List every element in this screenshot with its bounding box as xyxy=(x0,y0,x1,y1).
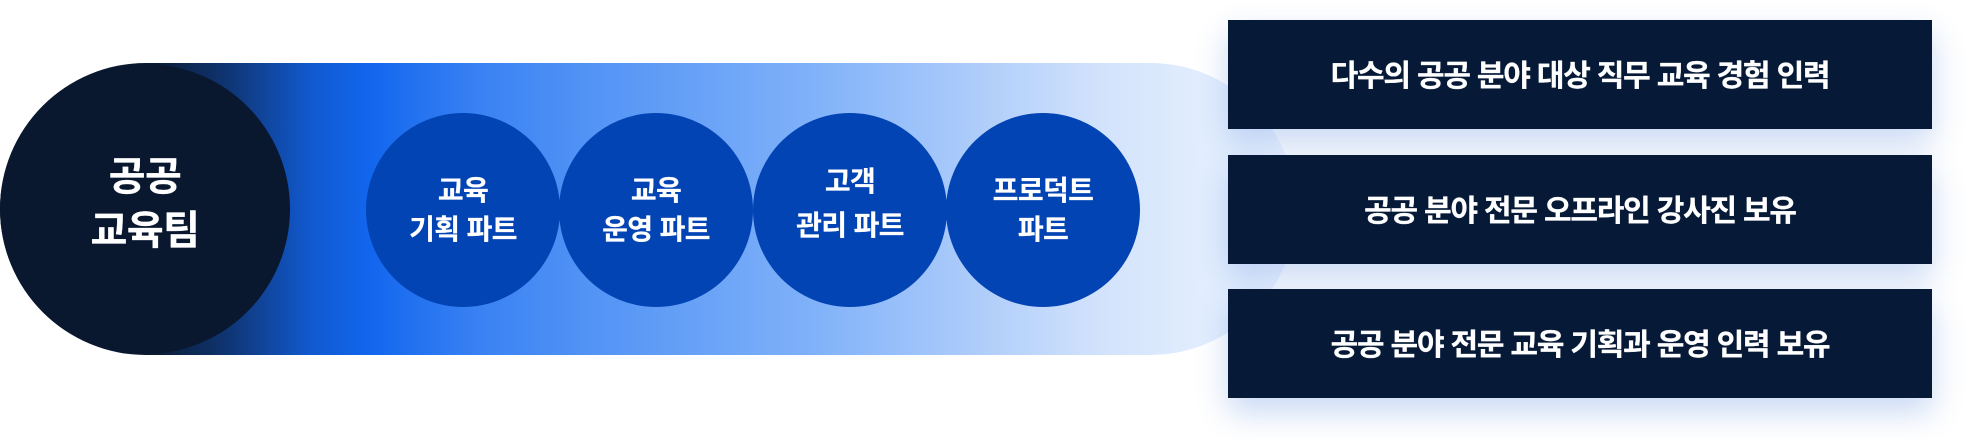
capability box 1: 다수의 공공 분야 대상 직무 교육 경험 인력 xyxy=(1331,60,1829,93)
part circle: customer management: 고객 xyxy=(825,166,875,197)
capability box 3: 공공 분야 전문 교육 기획과 운영 인력 보유 xyxy=(1331,329,1829,362)
capability box 1 xyxy=(1228,20,1932,129)
capability box 2 xyxy=(1228,155,1932,264)
part circle: education planning xyxy=(366,113,560,307)
main circle: public education team xyxy=(0,64,290,354)
part circle: product xyxy=(946,113,1140,307)
part circle: education operations: 교육 xyxy=(631,175,681,206)
part circle: education planning: 교육 xyxy=(438,175,488,206)
part circle: product: 프로덕트 xyxy=(993,175,1093,206)
gradient pill background xyxy=(0,63,1296,355)
part circle: customer management xyxy=(753,113,947,307)
part circle: education operations: 운영 파트 xyxy=(602,214,710,245)
part circle: customer management: 관리 파트 xyxy=(796,210,904,241)
main circle: public education team: 교육팀 xyxy=(91,208,199,252)
capability box 3 xyxy=(1228,289,1932,398)
part circle: education operations xyxy=(559,113,753,307)
part circle: education planning: 기획 파트 xyxy=(409,214,517,245)
capability box 2: 공공 분야 전문 오프라인 강사진 보유 xyxy=(1364,195,1796,228)
main circle: public education team: 공공 xyxy=(109,154,181,198)
part circle: product: 파트 xyxy=(1018,214,1068,245)
